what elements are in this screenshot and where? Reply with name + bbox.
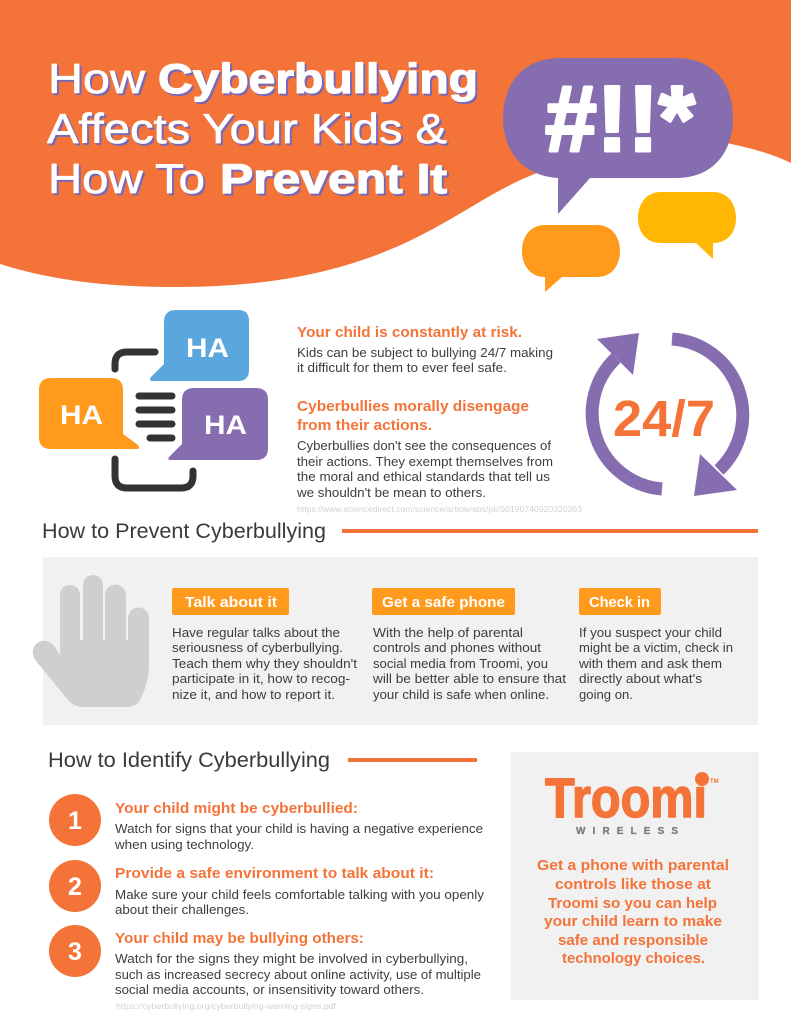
- text block: constant risk: [297, 324, 553, 375]
- title: Cyberbullying: [158, 55, 478, 102]
- item 3: bullying others: such as increased secrecy about online activity, use of multiple: [115, 967, 481, 982]
- panel: prevention tips: [33, 557, 758, 725]
- call to action text: Get a phone with parental: [537, 857, 729, 874]
- orange wave header background: [0, 0, 791, 287]
- item 2: safe environment: 2: [68, 873, 82, 901]
- tip: check in: going on.: [579, 687, 633, 702]
- tip: get a safe phone: will be better able to ensure that: [372, 671, 566, 686]
- tip: talk about it: nize it, and how to report it.: [172, 687, 335, 702]
- item 2: safe environment: Make sure your child feels comfortable talking with you openly: [115, 887, 485, 902]
- tip: check in: Check in: [589, 594, 650, 611]
- heading: how to prevent: How to Prevent Cyberbullying: [42, 520, 326, 543]
- item 3: bullying others: social media accounts, or insensitivity toward others.: [115, 982, 424, 997]
- tip: get a safe phone: Get a safe phone: [382, 594, 505, 611]
- text block: constant risk: Kids can be subject to bullying 24/7 making: [297, 345, 553, 360]
- tip: talk about it: Teach them why they shouldn't: [172, 656, 357, 671]
- text block: moral disengagement: their actions. They exempt themselves from: [297, 454, 553, 469]
- heading: how to identify: How to Identify Cyberbullying: [48, 749, 330, 772]
- icon: large purple speech bubble with symbols: [503, 58, 733, 214]
- tip: get a safe phone: social media from Troomi, you: [373, 656, 548, 671]
- panel: Troomi call to action: [511, 752, 759, 1000]
- logo: Troomi Wireless: TM: [710, 779, 719, 785]
- text block: constant risk: it difficult for them to ever feel safe.: [297, 360, 507, 375]
- text block: moral disengagement: Cyberbullies morally disengage: [297, 398, 529, 415]
- tip: check in: might be a victim, check in: [579, 640, 733, 655]
- title: Prevent It: [220, 155, 447, 202]
- title: [47, 55, 478, 202]
- logo: Troomi Wireless: WIRELESS: [576, 826, 678, 837]
- item 1: might be cyberbullied: Your child might be cyberbullied:: [115, 800, 358, 817]
- icon: yellow speech bubble: [638, 192, 736, 259]
- item 1: might be cyberbullied: Watch for signs that your child is having a negative experience: [115, 821, 483, 836]
- item 3: bullying others: Your child may be bullying others:: [115, 930, 364, 947]
- text block: moral disengagement: the moral and ethical standards that tell us: [297, 469, 551, 484]
- tip: get a safe phone: your child is safe when online.: [373, 687, 549, 702]
- item 1: might be cyberbullied: 1: [68, 807, 82, 835]
- tip: check in: [578, 588, 733, 702]
- call to action text: controls like those at: [555, 876, 711, 893]
- item 2: safe environment: Provide a safe environment to talk about it:: [115, 865, 434, 882]
- source link: sciencedirect: https://www.sciencedirect.com/science/article/abs/pii/S0190740920320363: [297, 505, 583, 514]
- icon: 24/7 circular arrows: [592, 333, 743, 496]
- text block: moral disengagement: [296, 398, 553, 500]
- tip: get a safe phone: controls and phones without: [373, 640, 541, 655]
- tip: talk about it: seriousness of cyberbullying.: [172, 640, 343, 655]
- text block: moral disengagement: from their actions.: [297, 417, 432, 434]
- item 2: safe environment: [49, 860, 485, 917]
- icon: HA chat bubbles and phone: HA: [186, 333, 229, 363]
- title: Affects Your Kids &: [47, 105, 447, 152]
- tip: talk about it: Have regular talks about the: [172, 625, 340, 640]
- source link: cyberbullying.org: https://cyberbullying.org/cyberbullying-warning-signs.pdf: [116, 1002, 337, 1011]
- icon: gray hand: [33, 575, 149, 707]
- call to action text: [537, 857, 729, 967]
- tip: talk about it: participate in it, how to recog-: [172, 671, 350, 686]
- tip: get a safe phone: [372, 588, 566, 702]
- title: How: [48, 55, 146, 102]
- tip: check in: directly about what's: [579, 671, 703, 686]
- icon: HA chat bubbles and phone: HA: [204, 410, 247, 440]
- text block: constant risk: Your child is constantly at risk.: [297, 324, 522, 341]
- tip: talk about it: [172, 588, 357, 702]
- logo: Troomi Wireless: Troomi: [545, 766, 707, 829]
- item 3: bullying others: [49, 925, 481, 997]
- item 3: bullying others: 3: [68, 938, 82, 966]
- call to action text: Troomi so you can help: [548, 895, 717, 912]
- title: How To: [48, 155, 205, 202]
- icon: large purple speech bubble with symbols: #!!*: [545, 66, 695, 171]
- item 2: safe environment: about their challenges.: [115, 902, 249, 917]
- text block: moral disengagement: we shouldn't be mean to others.: [296, 485, 486, 500]
- call to action text: technology choices.: [562, 950, 705, 967]
- call to action text: safe and responsible: [558, 932, 708, 949]
- tip: get a safe phone: With the help of parental: [373, 625, 523, 640]
- icon: HA chat bubbles and phone: HA: [60, 400, 103, 430]
- call to action text: your child learn to make: [544, 913, 722, 930]
- icon: orange speech bubble: [522, 225, 620, 292]
- item 3: bullying others: Watch for the signs they might be involved in cyberbullying,: [115, 951, 468, 966]
- tip: talk about it: Talk about it: [185, 594, 277, 611]
- icon: 24/7 circular arrows: 24/7: [613, 390, 715, 447]
- text block: moral disengagement: Cyberbullies don't see the consequences of: [297, 438, 551, 453]
- tip: check in: with them and ask them: [578, 656, 722, 671]
- item 1: might be cyberbullied: [49, 794, 483, 852]
- tip: check in: If you suspect your child: [579, 625, 722, 640]
- item 1: might be cyberbullied: when using technology.: [114, 837, 254, 852]
- icon: HA chat bubbles and phone: [39, 310, 268, 488]
